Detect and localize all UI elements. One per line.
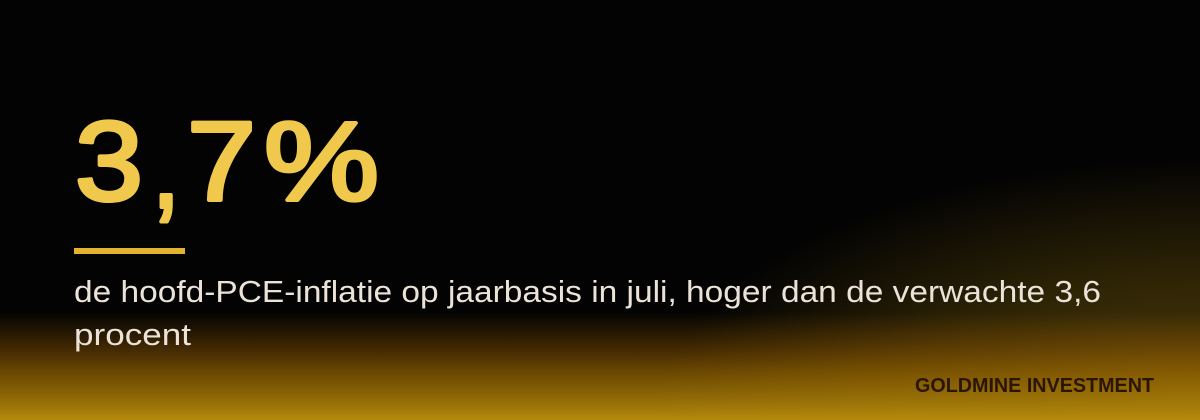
headline figure: , [152, 106, 180, 231]
headline figure [75, 99, 379, 231]
accent rule [74, 248, 185, 254]
description text: de hoofd-PCE-inflatie op jaarbasis in juli, hoger dan de verwachte 3,6 [74, 274, 1101, 309]
headline figure: % [264, 99, 379, 224]
description text [74, 274, 1101, 352]
headline figure: 3 [75, 99, 143, 224]
brand name: GOLDMINE INVESTMENT [915, 375, 1154, 397]
description text: procent [74, 317, 191, 352]
headline figure: 7 [187, 99, 256, 224]
